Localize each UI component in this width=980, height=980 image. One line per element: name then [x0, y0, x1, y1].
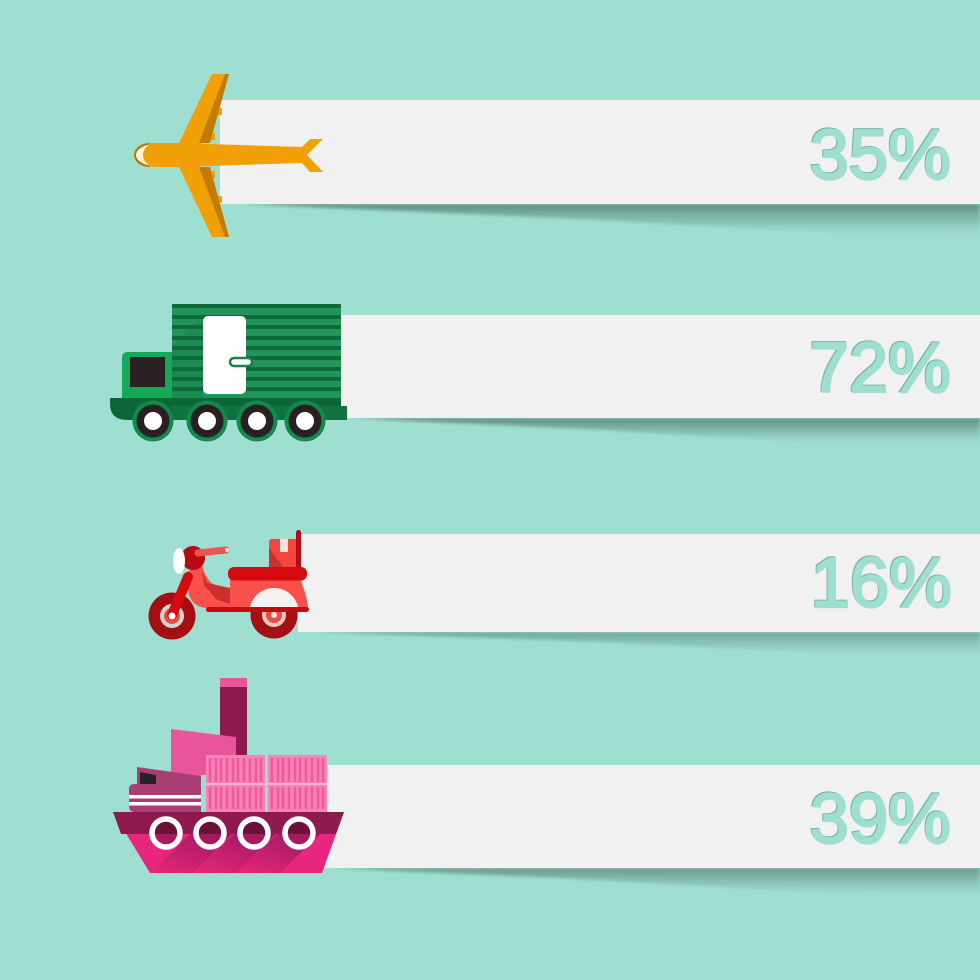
fender [250, 588, 298, 607]
door [203, 316, 246, 394]
icon: truck [110, 304, 347, 442]
seat [228, 567, 307, 580]
front wheel [148, 592, 196, 640]
value: 35%: 35% [810, 115, 951, 194]
funnel [220, 678, 247, 758]
body [187, 563, 308, 608]
container [172, 304, 341, 406]
strip 4: sea [322, 765, 980, 900]
chassis [110, 398, 347, 420]
value: 72%: 72% [810, 328, 951, 407]
bridge [129, 767, 201, 812]
cabin [171, 729, 236, 780]
rear wheel [250, 592, 298, 638]
strip 1: air [220, 100, 980, 240]
icon: ship [113, 678, 344, 873]
cab [122, 352, 172, 400]
wheels [132, 400, 326, 442]
strip 2: road [340, 315, 980, 448]
value: 16%: 16% [811, 543, 952, 622]
strip 3: scooter [298, 534, 980, 660]
fork [172, 577, 188, 615]
handlebar [181, 546, 205, 570]
value: 39%: 39% [810, 779, 951, 858]
hull [113, 812, 344, 873]
icon: airplane [134, 74, 323, 237]
portholes [152, 819, 313, 847]
box [269, 539, 298, 567]
icon: scooter [148, 530, 309, 640]
containers [206, 755, 327, 812]
